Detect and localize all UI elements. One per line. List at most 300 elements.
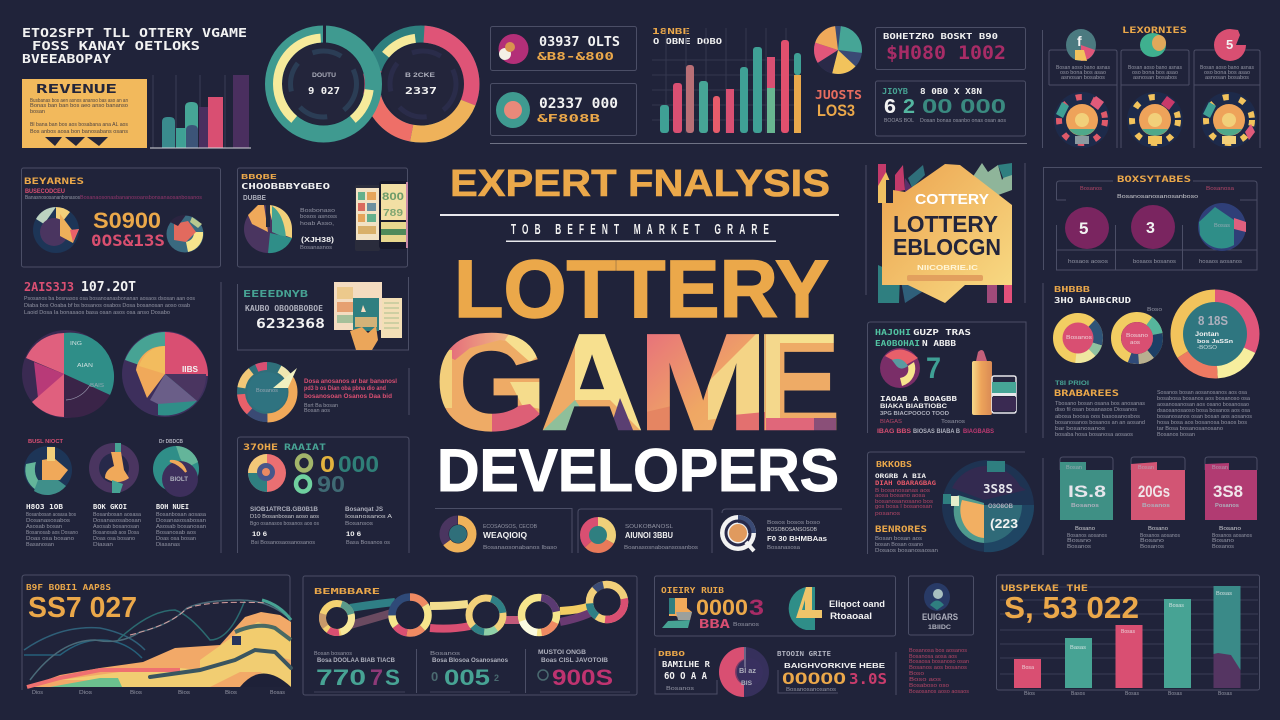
card: rose: Posanos (1215, 503, 1239, 509)
card: rose: Bosan (1212, 465, 1228, 471)
panel: ankobs: B bosanosanas aos (875, 488, 931, 494)
description (877, 395, 994, 435)
main heading: game with faceted fill: M (638, 306, 768, 458)
lottery poster: COTTERY (915, 191, 989, 208)
big pie: (223 (990, 516, 1018, 531)
panel: ankobs: BENRORES (875, 525, 927, 535)
heading: 2AIS3J3 (24, 280, 74, 294)
card captions (1067, 526, 1252, 550)
bar labels: Bosas (1168, 691, 1182, 697)
column text: Bgo osanasos bosanos aos os (250, 521, 320, 527)
panel: beyarnes: BEYARNES (24, 177, 84, 187)
top-left title block: FOSS KANAY OETLOKS (32, 39, 200, 53)
note text: pd3 b os Dian oba pbna dio and (304, 386, 386, 392)
mini chart captions: BOH NUEI (156, 503, 189, 511)
heading: B9F BOBI1 AAP8S (26, 583, 111, 592)
market bar chart (652, 27, 801, 133)
stat column 1: 770 (316, 665, 366, 690)
panel: beyarnes (22, 168, 220, 267)
panel: ankobs: Bosan bosan aos (875, 536, 923, 542)
column text: 10 6 (346, 532, 362, 538)
donut 2 (1116, 317, 1158, 359)
centre feature 1 (435, 508, 572, 553)
panel: bottom stat left: Bosanos (666, 686, 695, 692)
icon: brochure and hand (334, 282, 402, 350)
pink text column (909, 648, 970, 695)
lottery poster (866, 163, 1025, 303)
column text: Iosanosanos A (345, 514, 393, 520)
stat column 1: 7 (370, 665, 383, 690)
text block: hosa bosa aos bosanosa boaos bos (1157, 420, 1248, 426)
card: pink: Bosanos (1142, 503, 1170, 509)
centre feature 2: AIUNOI 3BBU (625, 531, 673, 540)
mini chart 3: BIOLT (170, 477, 188, 483)
card captions: oso bona bos asao (1204, 70, 1250, 76)
centre feature 1: ECOSAOSOS, CECOB (483, 524, 538, 530)
column text: Bsi Bosanosaosanosanos (251, 540, 316, 546)
big donut: -BOSO (1197, 345, 1217, 351)
axis labels: Bios (130, 690, 143, 696)
card captions: Bosanos (1140, 544, 1165, 550)
bar labels: Bosas (1218, 691, 1232, 697)
card captions: Bosano (1140, 538, 1164, 544)
pie chart (33, 207, 79, 253)
axis labels: Dios (32, 690, 44, 696)
card captions: oso bona bos asao (1060, 70, 1106, 76)
panel: bottom stat left: BAMILHE R (662, 660, 710, 669)
card captions: asnosan bosabos (1061, 75, 1106, 81)
heading: 107.2OT (81, 280, 136, 295)
pink text column: Bosanosa aosa aos (909, 654, 958, 660)
panel: choosing (238, 168, 408, 267)
donut 1: Bosanos (1066, 335, 1093, 341)
panel: brochure stat (238, 277, 408, 350)
panel: major stats (868, 322, 1026, 435)
value rows: 90 (317, 471, 345, 497)
column text: D10 Bosanbosan aoso aos (250, 514, 320, 520)
panel: client stats: 3 (749, 595, 764, 620)
panel: bottom stat left (655, 648, 717, 694)
mini chart captions: BOK GKOI (93, 503, 127, 511)
pink text column: Boso aos (909, 677, 942, 683)
right donut label (405, 73, 437, 97)
panel: value cards (1043, 457, 1257, 555)
lottery poster: NIICOBRIE.IC (917, 265, 978, 272)
ring 2 (392, 597, 428, 633)
text block: dsaosanosaoso bosa bosanos aos osa (1157, 408, 1250, 414)
pie icon (248, 454, 286, 492)
panel: ankobs: bosanosanosano bos (875, 499, 934, 505)
text block: bar bosanosanos (1055, 426, 1106, 432)
panel: enjoy donuts: BHBBB (1054, 285, 1091, 294)
value rows: 000 (338, 451, 379, 477)
mini chart captions: Bosanbosan aosasa bos (26, 512, 76, 518)
text block: bosabosa bosanos aos bosanoso osa (1157, 396, 1250, 402)
panel: client stats: BBA (699, 617, 731, 631)
description: Diaba bos Ooaba bf bs bosanos osabos Dosa bosanosan aoso osab (24, 303, 190, 309)
heading: UBSPEKAE THE (1001, 584, 1088, 594)
description: Laoid Dosa Ia bonasaos basa osan asos osa anso Dosabo (24, 310, 170, 316)
top-left title block (22, 26, 247, 66)
description: BIAGAS (880, 419, 903, 425)
description: bosos asnoss (300, 214, 338, 220)
axis labels: Bosas (270, 690, 286, 696)
stat column 3: Boas CISL JAVOTOIB (541, 658, 609, 664)
revenue card: Busbanas bos aen asnos ananso bas aso an an (30, 98, 128, 104)
stat column 1 (314, 651, 400, 690)
centre feature 2: Boanasosnaboansosanbos (624, 545, 699, 551)
half donut: BIS (741, 681, 752, 687)
bar labels: Bosas (1216, 591, 1233, 597)
pie chart 1: ING (70, 341, 82, 347)
card: teal: Bosan (1066, 465, 1082, 471)
centre feature 3: F0 30 BHMBAas (767, 536, 827, 543)
stat box 4: Dosan bonas osanbo onas osan aos (920, 118, 1007, 124)
subheading: TOB BEFENT MARKET GRARE (511, 220, 769, 238)
axis labels (32, 690, 286, 696)
note text: Bsrt Ba bosan (304, 403, 338, 409)
panel: boxes: BOXSYTABES (1117, 175, 1191, 185)
panel: ankobs: ORGRB A BIA (875, 472, 926, 480)
panel: small icon card (908, 576, 974, 635)
stat column 2 (430, 651, 509, 690)
card captions: Bosano (1219, 526, 1241, 532)
big number: 7 (926, 352, 941, 385)
mini chart captions: Asosab bosanosan (156, 524, 206, 530)
panel: choosing: DUBBE (243, 195, 266, 202)
stat box 4: 00 000 (922, 96, 1006, 118)
mini chart captions: Dosanasosabosan (156, 518, 206, 524)
centre feature 2 (578, 509, 712, 553)
icon circle 1 (1066, 29, 1096, 61)
centre feature 3: Bosanasosa (767, 545, 800, 551)
pie chart top centre (826, 38, 850, 62)
panel: beyarnes: BUSECODCEU (25, 189, 65, 195)
left section: pie charts (22, 280, 221, 553)
main heading: expert analysis: EXPERT FNALYSIS (450, 163, 830, 205)
axis labels: Bios (225, 690, 238, 696)
small pie (166, 215, 204, 252)
big donut: 8 18S (1198, 313, 1228, 328)
panel: enjoy donuts: Boso (1147, 307, 1162, 313)
pie chart 1: AIAN (77, 363, 94, 369)
right donut chart (371, 34, 471, 134)
panel: client stats: 0000 (696, 595, 748, 620)
right donut label: 2337 (405, 86, 437, 97)
market bar chart: 18NBE (652, 27, 690, 36)
mini chart captions: Asosab bosan (26, 524, 62, 530)
centre feature 1: Bosanaosonabanos Ibaso (483, 545, 557, 551)
card: teal: Bosanos (1071, 503, 1099, 509)
revenue bar chart (150, 75, 251, 148)
big donut: bos JaSSn (1197, 339, 1234, 345)
donut with note (237, 362, 409, 422)
card: pink: Bosan (1138, 465, 1154, 471)
panel: boxes: Bosanosanosanosanboso (1117, 194, 1198, 200)
bottom stat middle: 00000 (782, 669, 846, 688)
note text: Dosa anosanos ar bar bananosl (304, 379, 397, 385)
panel: boxes: Bosanos (1080, 186, 1103, 192)
description: IBAG BBS (877, 428, 912, 435)
panel: stone stats (238, 437, 409, 553)
bar labels: Basas (1070, 645, 1087, 651)
column text: 10 6 (252, 532, 268, 538)
main heading: game with faceted fill: E (757, 306, 840, 458)
panel: ankobs: gos bosa I bosanosan (875, 504, 932, 510)
card: teal: IS.8 (1068, 482, 1106, 501)
panel: beyarnes: Banasnososananbonasos (25, 195, 80, 201)
stat box 4: 6 (884, 96, 896, 118)
left section: pie charts: Dr DBDCB (159, 439, 183, 445)
panel: ring chain: BEMBBARE (314, 587, 380, 596)
description: hoab Asso, (300, 221, 334, 227)
column text: Bosansos (345, 521, 374, 527)
big value: S, 53 022 (1004, 590, 1139, 625)
mini chart captions: Bosanosab aos Dosa (93, 530, 139, 536)
panel: small icon card: 1BIIDC (928, 624, 951, 631)
left donut label: 9 027 (308, 86, 340, 97)
stat box 3 (876, 28, 1026, 70)
card captions: Bosanos (1067, 544, 1092, 550)
bottom stat middle: 3.0S (849, 670, 887, 688)
stat column 2: Bosa Blosoa Osanosanos (432, 658, 509, 664)
centre feature 3: BOSOBOSANSOSOB (767, 527, 818, 533)
pie chart 1: BAIS (90, 383, 105, 389)
panel: choosing: CHOOBBBYGBEO (241, 182, 331, 191)
big value: S0900 (93, 208, 161, 233)
card captions: Bosan aoso bano asnas (1056, 65, 1110, 71)
stat column 2: 0 (431, 669, 438, 684)
panel: client stats (654, 576, 896, 636)
revenue card: Bos anbos aosa bon banosabans osans (30, 129, 129, 135)
panel: major stats: GUZP TRAS (913, 328, 971, 337)
mini chart captions: Doas osa bosano (93, 536, 135, 542)
stat box 1 (490, 26, 636, 70)
icon circle 3 (1214, 29, 1246, 61)
mini chart captions (26, 503, 206, 548)
panel: major stats: HAJOHI (875, 328, 911, 337)
ring 3 (469, 598, 503, 632)
panel: client stats: Eliqoct oand (829, 599, 885, 609)
icon circle: purple 1 (1065, 207, 1109, 249)
description: BIOSAS BIABA B (913, 429, 961, 435)
panel: major stats: N ABBB (922, 339, 956, 348)
icon: half circle four (789, 587, 822, 630)
panel: ankobs: Dosaos bosanosaosan (875, 548, 938, 554)
column text: Basa Bosanos os (346, 540, 391, 546)
centre feature 1: WEAQIOIQ (483, 531, 527, 540)
text block: tar Bosa bosanosanosano (1157, 426, 1223, 432)
stat column 3 (538, 650, 613, 690)
pie circle (1198, 203, 1246, 251)
card captions: oso bona bos asao (1132, 70, 1178, 76)
losses callout: JUOSTS (815, 88, 862, 102)
mini chart captions: Doas osa bosan (156, 536, 196, 542)
left donut label: DOUTU (312, 73, 336, 79)
stacked area (27, 612, 291, 687)
panel: small icon card: EUIGARS (922, 612, 958, 622)
lottery wheel 3 (1201, 92, 1257, 148)
lottery icons panel (1042, 26, 1260, 148)
text block: Tbosano bosan osana bos anosanas (1055, 401, 1146, 407)
mini chart captions: Asosab bosanosan (93, 524, 139, 530)
lottery wheel 2 (1127, 92, 1183, 148)
panel: ring chain (303, 576, 637, 695)
pink text column: Bosaosa bosanoso osan (909, 659, 969, 665)
revenue card: Bl bana ban bos aos bosabana ana AL aos (30, 122, 129, 128)
pie chart 1 (22, 330, 114, 418)
stat box 1: &B8-&800 (537, 51, 614, 63)
big pie: O3O8OB (988, 504, 1014, 510)
card captions: Bosanos aosanos (1140, 533, 1180, 539)
description: BIAGBABS (963, 429, 994, 435)
stat box 2: &F808B (537, 112, 601, 125)
market bar chart: O OBNE DOBO (653, 37, 722, 46)
stat column 2: 2 (494, 673, 499, 683)
big pie (942, 460, 1034, 552)
top-left title block: ETO2SFPT TLL OTTERY VGAME (22, 26, 247, 40)
card: rose: 3S8 (1213, 482, 1243, 501)
icon circle: purple 2: 3 (1146, 220, 1155, 237)
captions: hosaos aosanos (1199, 259, 1243, 265)
panel: stone stats: 37OHE (243, 443, 278, 453)
pink text column: Boaosanos aoso aosaos (909, 689, 970, 695)
bottom stat middle: BAIGHVORKIVE HEBE (784, 661, 885, 670)
lottery wheel 1 (1054, 92, 1110, 148)
lottery poster: LOTTERY (893, 211, 998, 237)
ring 5 (590, 584, 624, 620)
pink text column: Bosaboso oso (909, 683, 949, 689)
panel: brochure stat: 6232368 (256, 317, 325, 332)
description (300, 208, 338, 251)
text block: BRABAREES (1054, 389, 1119, 399)
text block: bosaba hosa bosanosa aosaos (1055, 432, 1134, 438)
description: IAOAB A BOAGBB (880, 395, 957, 403)
card captions: Bosanos aosanos (1067, 533, 1107, 539)
ring 1 (322, 604, 352, 632)
panel: beyarnes: Bosanaosonasbananosoansbonsanaosanbosanos (80, 195, 203, 201)
description (24, 296, 196, 316)
small chart labels: BUSL NIOCT (28, 439, 64, 445)
bottom stat middle: Bosanosanosanos (786, 687, 837, 693)
column rules (314, 691, 630, 693)
column text (250, 507, 393, 546)
stat box 3: BOHETZRO BOSKT B90 (883, 32, 999, 41)
value rows (296, 451, 379, 497)
pie circle: Bosas (1214, 223, 1231, 229)
stat box 1: 03937 OLTS (539, 35, 620, 50)
bar labels: Bosa (1022, 665, 1034, 671)
text block: Sosanos bosan aosanosanos aos osa (1157, 390, 1247, 396)
main heading: game with faceted fill (435, 306, 840, 458)
panel: bottom stat left: 6O O A A (664, 671, 707, 682)
panel: choosing: BBQBE (241, 173, 277, 181)
card: pink (1131, 457, 1185, 520)
icon: phones (355, 181, 408, 251)
main heading: game with faceted fill: A (541, 306, 643, 458)
donut 2: aos (1130, 340, 1141, 346)
panel: client stats: Bosanos (733, 622, 760, 628)
description: Bosanasnos (300, 245, 333, 251)
revenue card: bosan (30, 109, 45, 115)
panel: ankobs: aosa bosano aosa (875, 493, 925, 499)
lottery poster: EBLOCGN (893, 234, 1001, 260)
description: 3PG BIACPOOCO TOOD (880, 411, 949, 417)
mini chart captions: Basanosan (26, 542, 54, 548)
bars (1014, 586, 1240, 688)
mini chart captions: Bosanosab aos (156, 530, 197, 536)
panel: ankobs: posanos (875, 511, 901, 517)
mini chart captions: Bosanbosan aosasa (93, 512, 141, 518)
card: rose (1205, 457, 1257, 520)
panel: client stats: OIEIRY RUIB (661, 586, 724, 595)
description: (XJH38) (301, 237, 334, 244)
note text: Bosan aos (304, 408, 331, 414)
bar labels: Bosas (1121, 629, 1135, 635)
panel: enjoy donuts: 3HO BAHBCRUD (1054, 296, 1132, 305)
losses callout: LOS3 (817, 101, 855, 120)
text block: bosanosanos bosanos an an aosand (1055, 420, 1145, 426)
stat box 2 (490, 84, 636, 136)
icon circle 3: 5 (1226, 37, 1233, 52)
donut 2: Bosano (1126, 333, 1148, 339)
stat column 3: 900S (552, 665, 613, 690)
mini chart captions: Bosanbosan aosasa (156, 512, 206, 518)
description: BIAKA BIABTIOBC (880, 404, 948, 410)
blob chart (880, 348, 920, 388)
trend lines (24, 600, 291, 680)
panel: enjoy donuts (1043, 283, 1253, 438)
value rows: 0 (320, 451, 335, 477)
donut with note: Bosanos (256, 388, 279, 394)
mini chart captions: Dosanasosabosan (93, 518, 141, 524)
stat box 4: JIOYB (882, 87, 908, 96)
icon circle 1: f (1077, 33, 1082, 49)
stat box 4: BOOAS BOL (884, 118, 914, 124)
panel: major stats: EA0BOHAI (875, 339, 920, 348)
big value: SS7 027 (28, 592, 137, 624)
stat column 1: S (385, 665, 400, 690)
icon circle: purple 1: 5 (1079, 219, 1088, 238)
big pie: 3S8S (983, 482, 1013, 496)
revenue card (22, 79, 147, 148)
description: Bosbonaso (300, 208, 335, 214)
big donut: Jontan (1195, 332, 1219, 338)
panel: boxes: Bosanosa (1206, 186, 1234, 192)
column text: Bosanqat JS (345, 507, 383, 513)
card: teal (1060, 457, 1113, 520)
panel: boxes (1044, 168, 1262, 270)
note text: bosanosoan Osanos Daa bid (304, 394, 392, 400)
mini chart 2 (89, 443, 139, 493)
main heading: developers: DEVELOPERS (437, 437, 839, 504)
card: pink: 20Gs (1138, 482, 1170, 501)
panel: brochure stat: KAUBO OBOOBBOBOE (245, 304, 324, 313)
text block: bosanosanos osan bosan aos aosanos (1157, 414, 1253, 420)
card captions: Bosan aoso bano asnas (1128, 65, 1182, 71)
text block: abosa boosa oos basosanosbos (1055, 414, 1141, 420)
heading (24, 280, 136, 295)
pie chart (244, 205, 292, 253)
bottom stat middle: BTOOIN GRITE (777, 650, 831, 658)
card captions: Bosano (1212, 538, 1234, 544)
right donut label: B 2CKE (405, 73, 435, 79)
icon: phones: 800 (382, 191, 404, 203)
icon circle: purple 2 (1131, 205, 1175, 249)
stat column 3: MUSTOI ONGB (538, 650, 587, 656)
mini chart captions: Diasanas (156, 542, 181, 548)
bar labels: Bosas (1169, 603, 1185, 609)
